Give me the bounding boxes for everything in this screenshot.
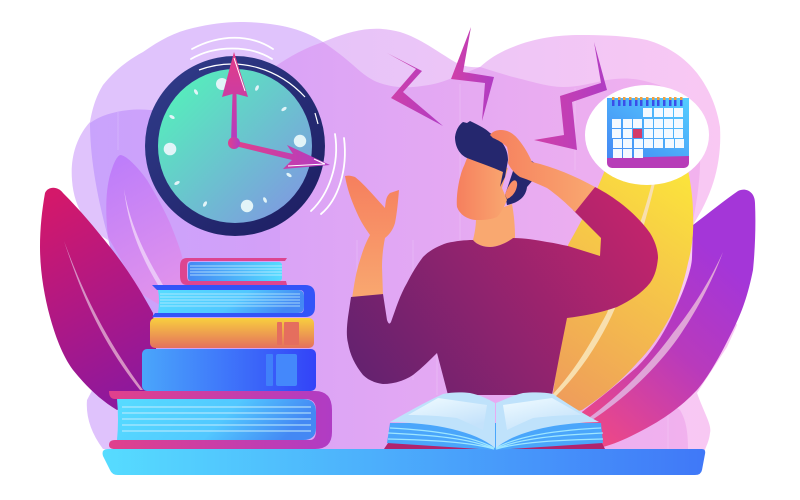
bubble bbox=[585, 85, 709, 185]
open book right page bbox=[496, 392, 599, 448]
clock rim highlight bbox=[199, 64, 318, 124]
mid purple main shape bbox=[140, 42, 700, 449]
clock bbox=[145, 38, 345, 236]
clock shake lines bbox=[191, 38, 345, 214]
clock hour markers bbox=[164, 78, 306, 212]
leaf: magenta left bbox=[40, 188, 160, 410]
lavender lower-left lobe bbox=[87, 385, 220, 449]
clock hour hand bbox=[222, 52, 248, 143]
light pink top-right lobe bbox=[273, 29, 737, 450]
clock rim bbox=[145, 56, 325, 236]
open book bbox=[384, 392, 605, 450]
open book page edges bbox=[387, 423, 603, 450]
medium purple left lobe bbox=[90, 110, 280, 449]
lavender top-left lobe bbox=[72, 22, 353, 300]
hair bbox=[455, 121, 508, 187]
face bbox=[457, 156, 508, 220]
clock face bbox=[158, 69, 312, 223]
lightning bolts bbox=[387, 27, 607, 150]
ear bbox=[505, 180, 517, 199]
calendar day cells bbox=[612, 108, 684, 158]
clock minute hand bbox=[235, 141, 330, 169]
calendar highlighted day bbox=[633, 129, 642, 138]
speech bubble with calendar bbox=[585, 85, 709, 185]
open book base bbox=[384, 443, 605, 449]
table bbox=[103, 449, 705, 475]
torso and sleeves bbox=[347, 187, 658, 395]
yellow swoosh bbox=[545, 170, 693, 420]
book stack bbox=[109, 258, 332, 449]
neck bbox=[473, 204, 515, 247]
open book left page bbox=[390, 392, 495, 448]
orange book bbox=[150, 318, 314, 348]
leaf: right purple to pink bbox=[575, 190, 755, 448]
clock hub bbox=[228, 137, 240, 149]
calendar bbox=[607, 97, 689, 168]
person bbox=[345, 121, 658, 395]
hand and forearm on head bbox=[490, 130, 595, 212]
large bottom book bbox=[109, 391, 332, 449]
blue book bbox=[142, 349, 316, 391]
raised arm and hand bbox=[345, 176, 399, 299]
background blob bbox=[72, 22, 737, 450]
second book bbox=[152, 285, 315, 317]
leaf: purple behind books bbox=[106, 155, 190, 310]
back of hair and beard bbox=[505, 160, 538, 205]
top book bbox=[180, 258, 287, 285]
